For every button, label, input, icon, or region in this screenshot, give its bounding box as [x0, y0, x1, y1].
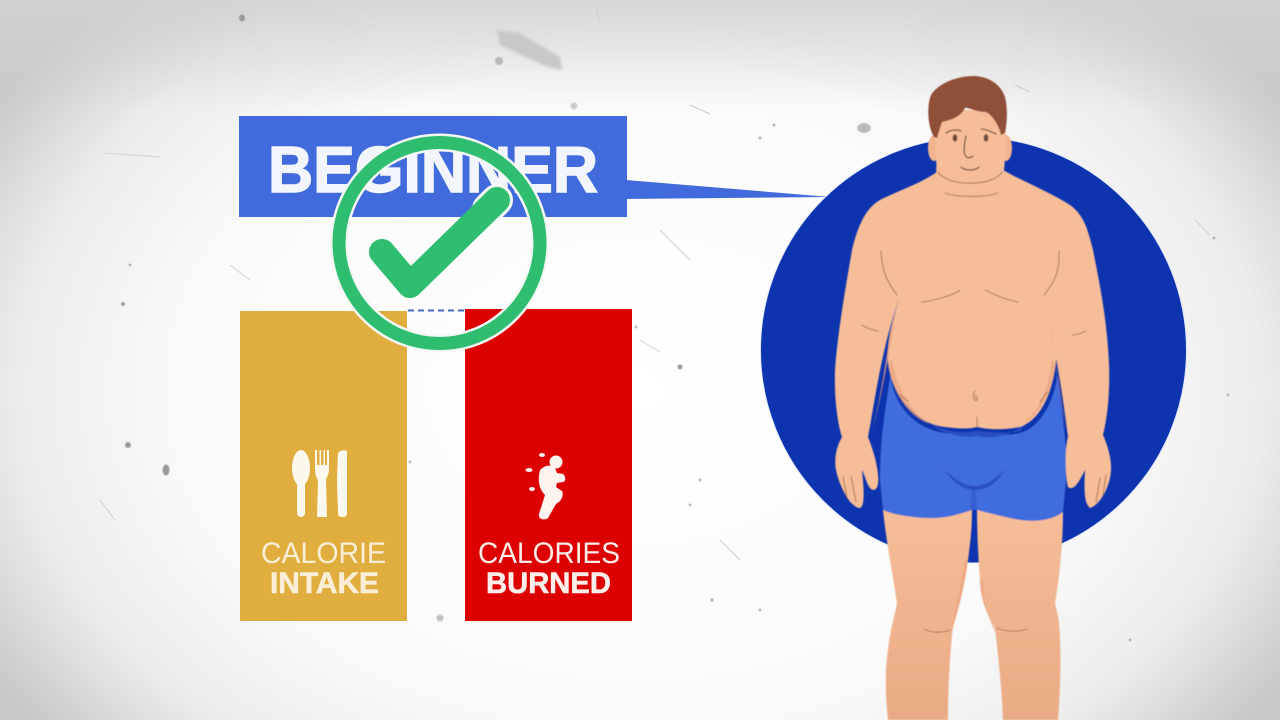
neck and head	[936, 150, 1004, 188]
banner: beginner label	[239, 116, 627, 217]
shorts	[880, 372, 1066, 521]
panel: calorie intake: INTAKE	[270, 567, 379, 600]
figure: man	[835, 76, 1111, 720]
dashed balance line	[408, 310, 465, 312]
panel: calorie intake	[240, 311, 407, 621]
icon: green check badge	[339, 142, 540, 344]
icon: running figure	[526, 453, 565, 519]
blue circle behind figure	[760, 137, 1186, 563]
connector from label to figure	[626, 180, 830, 199]
arm and belly shading	[872, 312, 896, 432]
smudge	[497, 30, 562, 70]
label: calories burned: CALORIES	[478, 537, 620, 570]
shadow under belly	[930, 421, 1028, 437]
label: calorie intake: CALORIE	[261, 537, 386, 570]
panel: calories burned: BURNED	[486, 567, 611, 600]
banner: beginner label: BEGINNER	[268, 133, 598, 206]
face details	[946, 129, 996, 170]
body lines	[843, 172, 1106, 632]
left arm and torso	[835, 170, 1111, 508]
icon: cutlery	[292, 450, 347, 517]
panel: calories burned	[465, 309, 632, 621]
legs	[883, 510, 972, 720]
hair	[928, 76, 1007, 138]
